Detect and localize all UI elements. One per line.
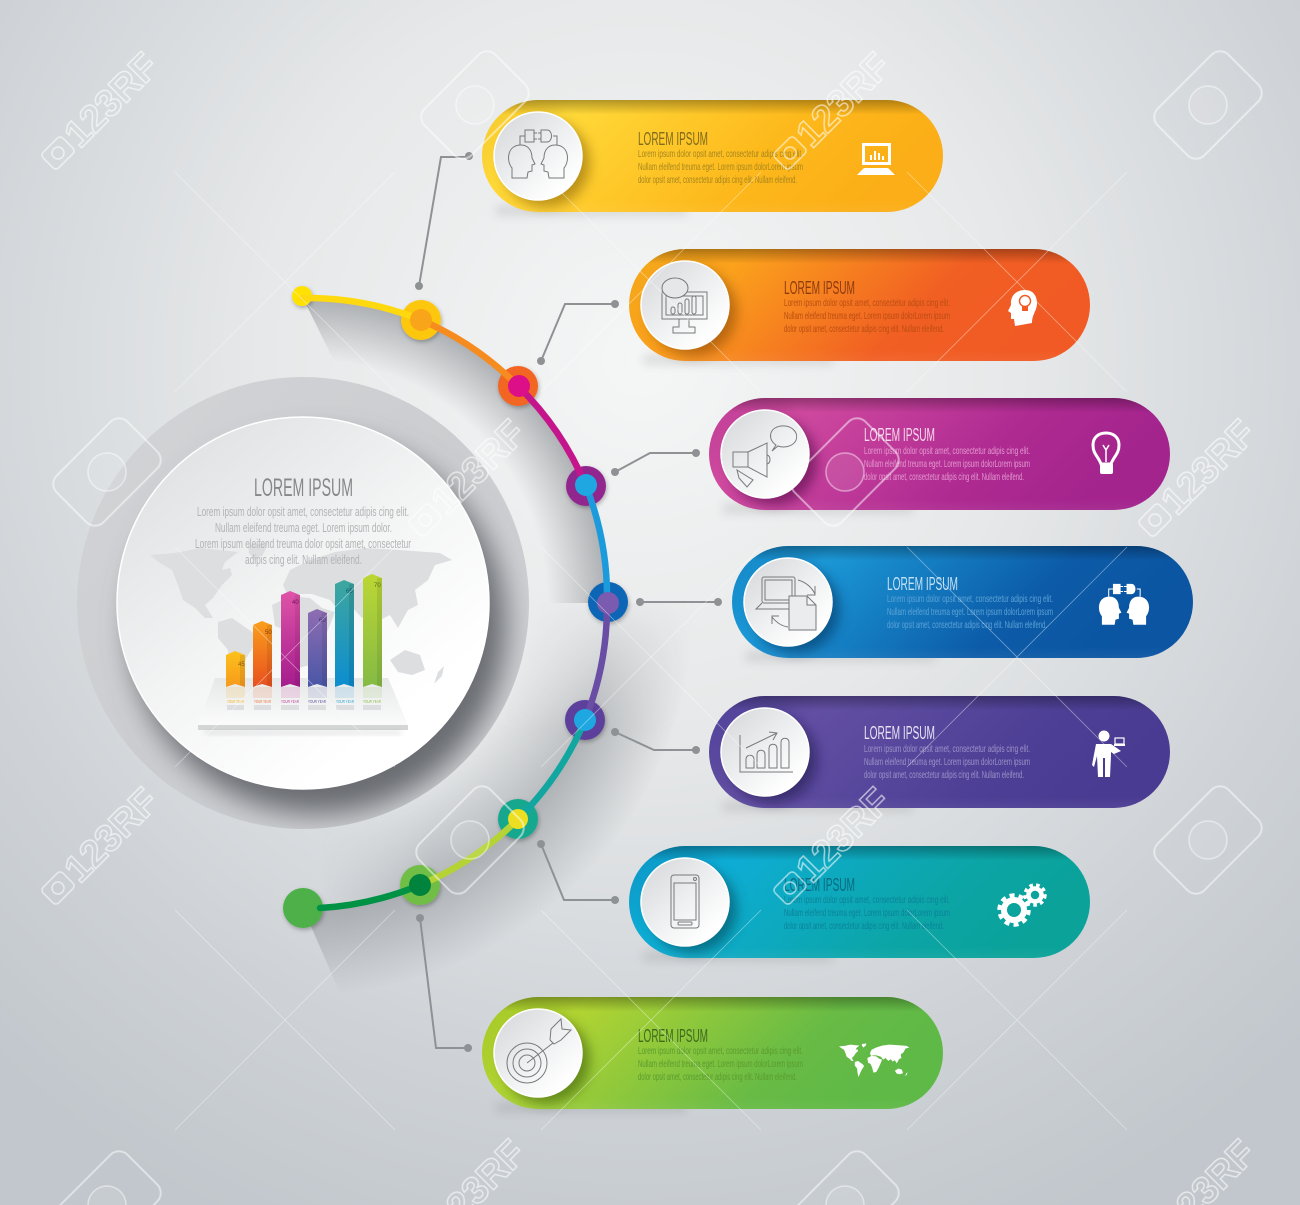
bar 2 [253,621,272,698]
text block: central: Nullam eleifend treuma eget. Lorem ipsum dolor. [215,520,392,535]
white disc [117,417,489,789]
connector 6 [537,840,619,904]
icon disc: two heads with plug [494,112,582,200]
bar labels [227,699,382,710]
panel: step 1 yellow [482,100,943,215]
text block: central [195,504,411,567]
text block: step 7: Lorem ipsum dolor opsit amet, consectetur adipis cing elit. [638,1045,803,1057]
text block: step 6: Nullam eleifend treuma eget. Lorem ipsum dolorLorem ipsum [784,907,950,919]
stock watermark overlay: 123RF [57,45,167,156]
heading: step 7: LOREM IPSUM [638,1026,708,1046]
icon: laptop [857,143,895,175]
bar labels: YOUR YEAR [227,699,244,704]
bar labels: YOUR YEAR [254,699,271,704]
icon: heads with plug [1099,584,1149,625]
text block: step 2 [784,297,950,335]
text block: step 3: Nullam eleifend treuma eget. Lorem ipsum dolorLorem ipsum [864,458,1030,470]
bar 6 [363,574,382,698]
world map backdrop [150,543,452,687]
long shadow of the timeline arc [302,296,695,993]
text block: step 3 [864,445,1030,483]
connector lines [415,152,722,1052]
bar labels: YOUR YEAR [308,699,327,704]
icon disc: target with arrow [494,1009,582,1097]
text block: central: Lorem ipsum eleifend treuma dolor opsit amet, consectetur [195,536,411,551]
bar labels: YOUR YEAR [336,699,355,704]
text block: step 4: dolor opsit amet, consectetur adipis cing elit. Nullam eleifend. [887,619,1047,631]
text block: central: Lorem ipsum dolor opsit amet, consectetur adipis cing elit. [197,504,409,519]
arc outer node discs [283,286,628,928]
text block: step 7: dolor opsit amet, consectetur adipis cing elit. Nullam eleifend. [638,1071,797,1083]
heading: step 4: LOREM IPSUM [887,574,958,594]
heading: step 6: LOREM IPSUM [784,875,855,895]
bar 1 [226,651,245,698]
panel: step 5 purple [709,696,1170,811]
bar 3: 40 [292,600,299,606]
heading: step 1: LOREM IPSUM [638,129,708,149]
connector 2 [537,300,619,365]
text block: step 7 [638,1045,803,1083]
text block: step 1: Nullam eleifend treuma eget. Lorem ipsum dolorLorem ipsum [638,161,803,173]
text block: step 4: Nullam eleifend treuma eget. Lorem ipsum dolorLorem ipsum [887,606,1053,618]
chart platform [198,678,408,735]
bar 6: 70 [374,583,381,589]
text block: step 4 [887,593,1053,631]
panel: step 2 orange [629,249,1090,364]
text block: step 5: dolor opsit amet, consectetur adipis cing elit. Nullam eleifend. [864,769,1024,781]
stock watermark overlay: 123RF [789,780,899,891]
icon: world map [839,1044,909,1077]
connector 5 [611,728,700,754]
icon: gears [1000,885,1045,924]
heading: central: LOREM IPSUM [254,474,353,502]
panel: step 4 blue [732,546,1193,661]
text block: step 6: Lorem ipsum dolor opsit amet, consectetur adipis cing elit. [784,894,950,906]
connector 7 [416,914,472,1052]
outer grey ring [77,377,529,829]
icon disc: laptop and document [744,558,832,646]
text block: step 1 [638,148,803,186]
bar 2: 50 [265,630,272,636]
bar labels: YOUR YEAR [281,699,300,704]
text block: step 7: Nullam eleifend treuma eget. Lorem ipsum dolorLorem ipsum [638,1058,803,1070]
icon: person with laptop [1092,730,1125,777]
stock watermark overlay: 123RF [789,45,899,156]
icon: head with bulb [1008,290,1037,326]
text block: step 1: Lorem ipsum dolor opsit amet, consectetur adipis cing elit. [638,148,803,160]
text block: step 2: Nullam eleifend treuma eget. Lorem ipsum dolorLorem ipsum [784,310,950,322]
heading: step 2: LOREM IPSUM [784,278,855,298]
panel: step 6 teal [629,846,1090,961]
bar 5: 65 [346,589,353,595]
bar 3 [281,591,300,698]
text block: step 2: dolor opsit amet, consectetur adipis cing elit. Nullam eleifend. [784,323,944,335]
timeline arc with nodes [283,286,628,928]
stock watermark overlay: 123RF [424,412,534,523]
heading: step 3: LOREM IPSUM [864,425,935,445]
stock watermark overlay: 123RF [57,780,167,891]
panel: step 3 magenta [709,398,1170,513]
connector 1 [415,152,473,290]
text block: central: adipis cing elit. Nullam eleifend. [245,552,362,567]
text block: step 5 [864,743,1030,781]
text block: step 5: Lorem ipsum dolor opsit amet, consectetur adipis cing elit. [864,743,1030,755]
text block: step 4: Lorem ipsum dolor opsit amet, consectetur adipis cing elit. [887,593,1053,605]
heading: step 5: LOREM IPSUM [864,723,935,743]
bar 5 [335,580,354,698]
bar 4 [308,609,327,698]
icon disc: megaphone [721,410,809,498]
text block: step 2: Lorem ipsum dolor opsit amet, consectetur adipis cing elit. [784,297,950,309]
bar chart [198,574,408,735]
stock watermark overlay: 123RF [1154,412,1264,523]
icon disc: monitor with bars [641,261,729,349]
icon disc: smartphone [641,858,729,946]
connector 3 [611,449,700,476]
icon disc: growth chart [721,708,809,796]
panel: central circle [77,377,529,829]
bar 1: 45 [238,662,245,668]
text block: step 6: dolor opsit amet, consectetur adipis cing elit. Nullam eleifend. [784,920,944,932]
bar labels: YOUR YEAR [363,699,382,704]
text block: step 5: Nullam eleifend treuma eget. Lorem ipsum dolorLorem ipsum [864,756,1030,768]
text block: step 3: dolor opsit amet, consectetur adipis cing elit. Nullam eleifend. [864,471,1024,483]
text block: step 6 [784,894,950,932]
arc inner node dots [410,309,432,331]
bar 4: 60 [319,618,326,624]
icon: light bulb [1093,433,1119,474]
text block: step 1: dolor opsit amet, consectetur adipis cing elit. Nullam eleifend. [638,174,797,186]
connector 4 [636,598,722,606]
arc segments [302,298,607,908]
panel: step 7 green [482,997,943,1112]
text block: step 3: Lorem ipsum dolor opsit amet, consectetur adipis cing elit. [864,445,1030,457]
